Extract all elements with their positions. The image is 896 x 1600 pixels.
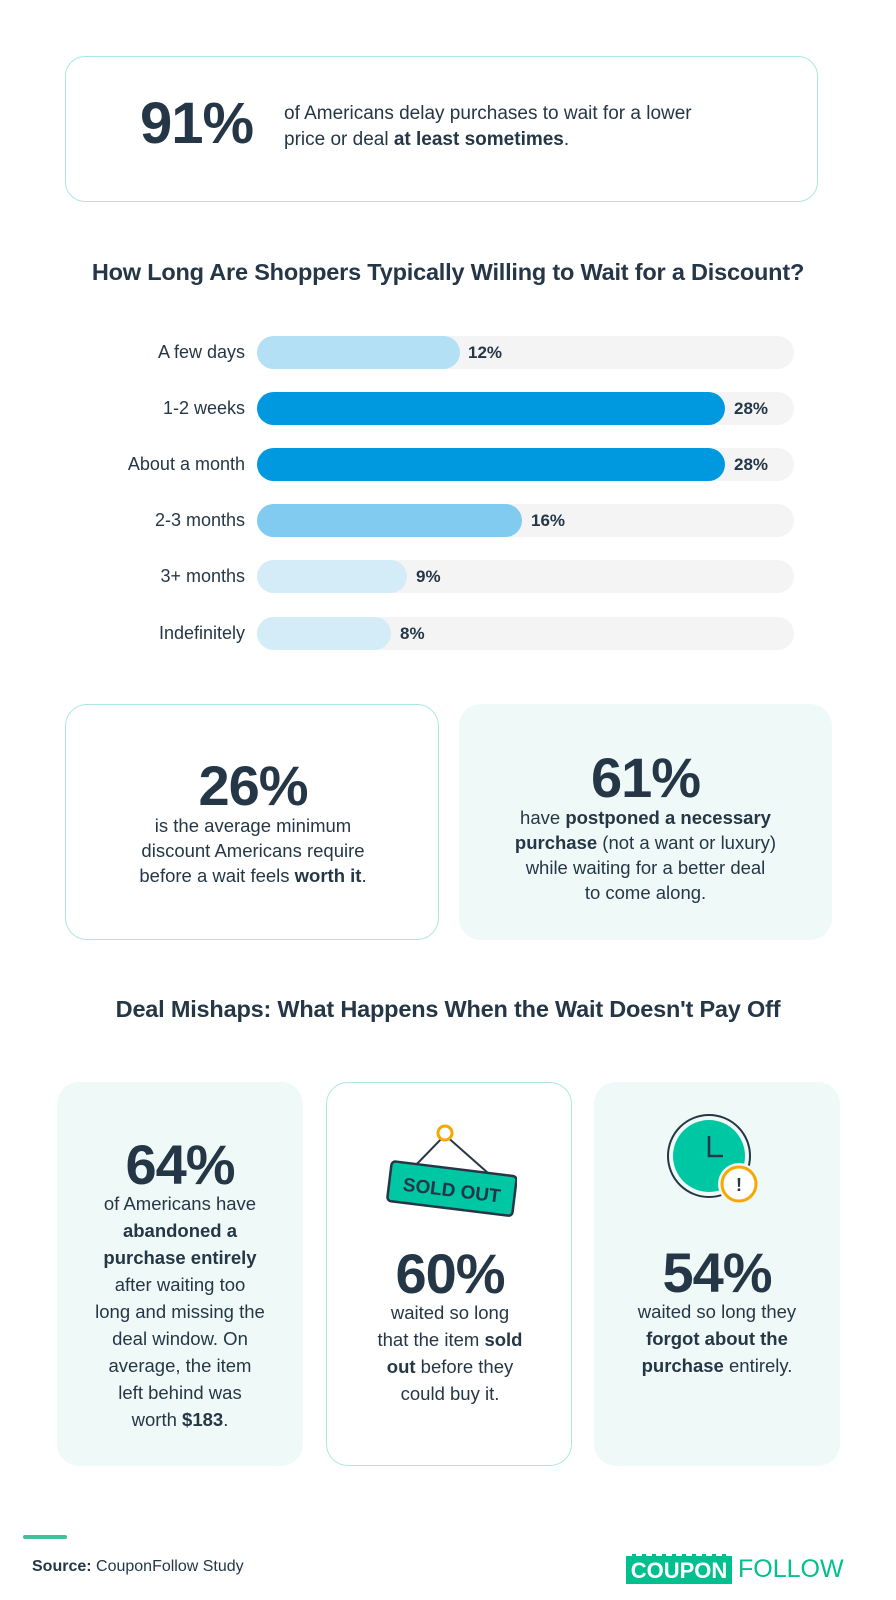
stat number 61%: 61% — [591, 746, 700, 809]
stat text: that the item sold — [378, 1329, 522, 1350]
stat text — [638, 1301, 796, 1376]
bar: a few days: A few days — [158, 342, 245, 362]
heading: how long: How Long Are Shoppers Typically Willing to Wait for a Discount? — [92, 259, 804, 285]
icon: clock with alert: ! — [736, 1175, 742, 1195]
bar: a few days — [158, 336, 794, 369]
stat text: abandoned a — [123, 1220, 237, 1241]
stat text: discount Americans require — [141, 840, 365, 861]
stat text: while waiting for a better deal — [526, 857, 765, 878]
stat text: average, the item — [109, 1355, 251, 1376]
footer accent line — [23, 1535, 67, 1539]
stat text: of Americans delay purchases to wait for a lower — [284, 103, 692, 124]
bar: indefinitely: Indefinitely — [159, 623, 245, 643]
bar: 1-2 weeks — [163, 392, 794, 425]
heading: deal mishaps: Deal Mishaps: What Happens When the Wait Doesn't Pay Off — [116, 996, 780, 1022]
stat text — [139, 815, 367, 886]
stat text: purchase entirely — [103, 1247, 257, 1268]
bar: 3+ months: 3+ months — [160, 566, 245, 586]
stat number 64%: 64% — [125, 1133, 235, 1196]
stat text — [95, 1193, 265, 1430]
bar: 2-3 months: 2-3 months — [155, 510, 245, 530]
stat text: of Americans have — [104, 1193, 256, 1214]
stat text: waited so long they — [638, 1301, 796, 1322]
stat text: left behind was — [118, 1382, 242, 1403]
stat text: forgot about the — [646, 1328, 788, 1349]
bar: 3+ months — [160, 560, 794, 593]
bar: indefinitely — [159, 617, 794, 650]
panel: 26% — [65, 704, 439, 940]
bar: 2-3 months — [155, 504, 794, 537]
bar: indefinitely: 8% — [400, 624, 425, 643]
panel: 61% — [459, 704, 832, 940]
stat text: price or deal at least sometimes. — [284, 129, 569, 150]
bar: 3+ months: 9% — [416, 567, 441, 586]
stat text: is the average minimum — [155, 815, 351, 836]
icon: sold out sign: SOLD OUT — [402, 1175, 502, 1208]
icon: clock with alert — [667, 1114, 758, 1202]
source text: Source: CouponFollow Study — [32, 1558, 244, 1575]
logo: couponfollow — [626, 1554, 844, 1584]
bar: about a month: About a month — [128, 454, 245, 474]
stat text: deal window. On — [112, 1328, 248, 1349]
bar: 1-2 weeks: 1-2 weeks — [163, 398, 245, 418]
bar chart: wait duration — [128, 336, 794, 650]
stat text: worth $183. — [132, 1409, 228, 1430]
stat text — [284, 103, 692, 150]
stat text: purchase entirely. — [642, 1355, 792, 1376]
stat text — [515, 807, 776, 903]
stat text: out before they — [387, 1356, 513, 1377]
stat text: have postponed a necessary — [520, 807, 771, 828]
bar: 1-2 weeks: 28% — [734, 399, 768, 418]
bar: about a month — [128, 448, 794, 481]
stat number 60%: 60% — [395, 1242, 505, 1305]
panel: 64% — [57, 1082, 303, 1466]
panel: 60% sold out — [326, 1082, 572, 1466]
stat text: could buy it. — [401, 1383, 499, 1404]
stat text — [378, 1302, 522, 1404]
stat text: before a wait feels worth it. — [139, 865, 367, 886]
stat text: after waiting too — [115, 1274, 245, 1295]
icon: sold out sign — [386, 1124, 517, 1217]
bar: about a month: 28% — [734, 455, 768, 474]
stat text: long and missing the — [95, 1301, 265, 1322]
stat text: purchase (not a want or luxury) — [515, 832, 776, 853]
bar: a few days: 12% — [468, 343, 502, 362]
stat text: waited so long — [391, 1302, 509, 1323]
stat number 91%: 91% — [140, 91, 253, 156]
bar: 2-3 months: 16% — [531, 511, 565, 530]
logo: couponfollow: COUPON — [631, 1558, 727, 1583]
stat number 54%: 54% — [662, 1241, 772, 1304]
panel: 54% forgot — [594, 1082, 840, 1466]
stat number 26%: 26% — [198, 754, 308, 817]
logo: couponfollow: FOLLOW — [738, 1555, 844, 1583]
stat text: to come along. — [585, 882, 706, 903]
panel: top stat 91% — [65, 56, 818, 202]
